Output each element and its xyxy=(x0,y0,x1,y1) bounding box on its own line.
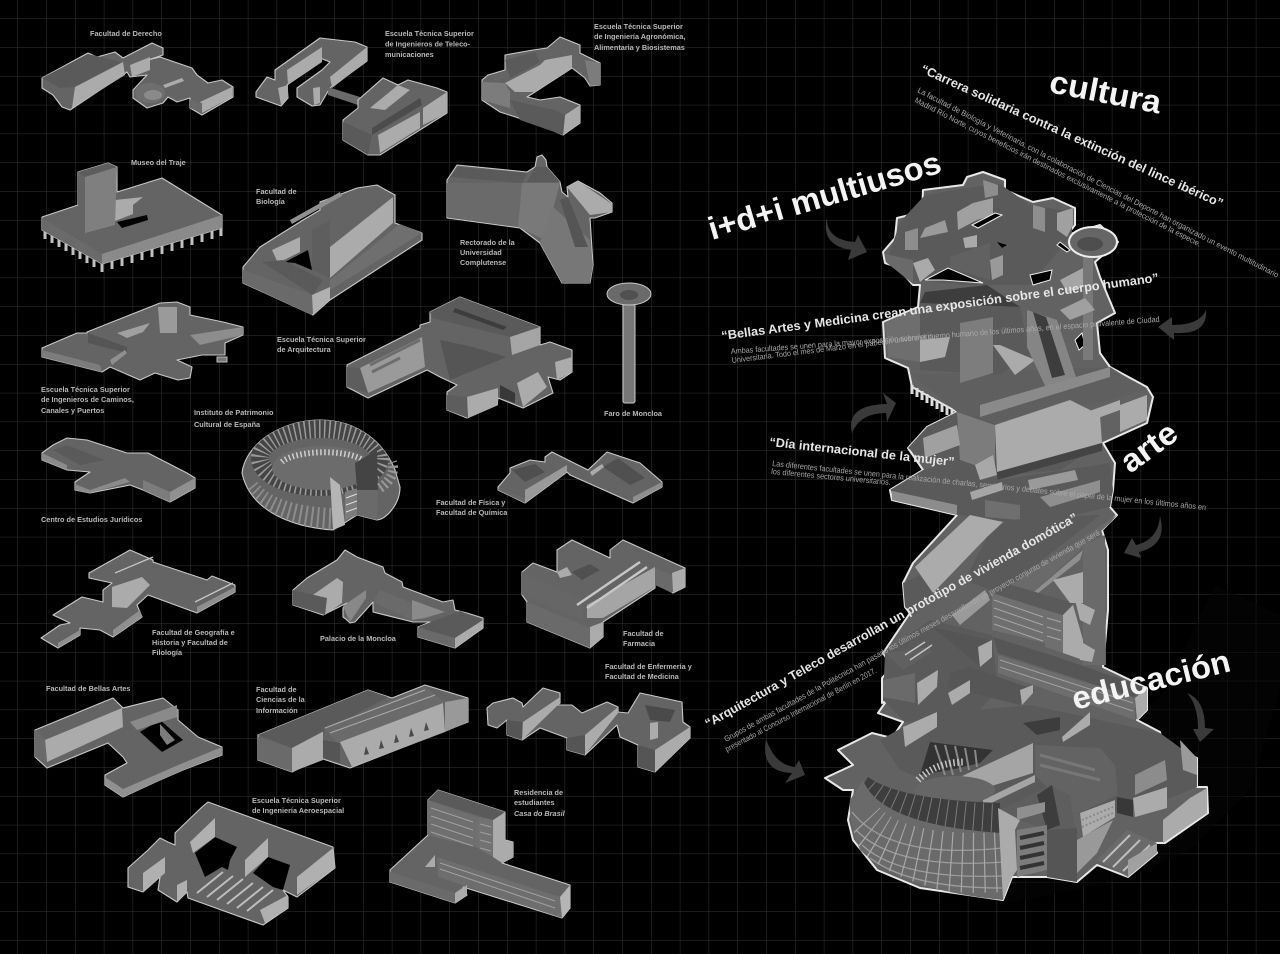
building: Ciencias de la Información xyxy=(256,685,468,772)
label: Escuela Técnica Superior xyxy=(41,385,130,394)
museo block and columns xyxy=(885,285,1147,425)
slabs xyxy=(890,455,1113,525)
label: Filología xyxy=(152,648,183,657)
label: Escuela Técnica Superior xyxy=(385,29,474,38)
building: Agronómica xyxy=(482,22,685,135)
label: Farmacia xyxy=(623,639,656,648)
coliseum xyxy=(850,777,1047,900)
building: Facultad de Derecho xyxy=(42,29,233,115)
label: Casa do Brasil xyxy=(514,809,566,818)
building: Faro de Moncloa xyxy=(604,283,663,418)
building: Física y Química xyxy=(436,452,662,517)
news: Carrera solidaria: “Carrera solidaria contra la extinción del lince ibérico” xyxy=(919,62,1225,211)
label: Canales y Puertos xyxy=(41,406,104,415)
label: de Ingenieros de Teleco- xyxy=(385,40,471,48)
label: Información xyxy=(256,706,298,715)
building: Instituto de Patrimonio xyxy=(194,408,400,530)
news: Bellas Artes: “Bellas Artes y Medicina crean una exposición sobre el cuerpo humano” xyxy=(721,271,1160,343)
label: Facultad de Derecho xyxy=(90,29,162,38)
label: municaciones xyxy=(385,50,434,59)
news body line 2: Madrid Río Norte, cuyos beneficios irán destinados exclusivamente a la protección de la especie. xyxy=(913,96,1203,249)
building: Caminos xyxy=(41,302,243,415)
striped block xyxy=(992,572,1095,662)
label: Historia y Facultad de xyxy=(152,638,228,647)
news body line 2: los diferentes sectores universitarios. xyxy=(771,467,891,487)
label: Facultad de Medicina xyxy=(605,672,680,681)
label: de Ingenieros de Caminos, xyxy=(41,395,134,404)
top cluster xyxy=(885,180,1083,292)
theme heading: i+d+i multiusos: i+d+i multiusos xyxy=(704,144,945,247)
label: de Arquitectura xyxy=(277,345,332,354)
building: Telecomunicaciones xyxy=(256,29,474,155)
label: Ciencias de la xyxy=(256,695,306,704)
label: Cultural de España xyxy=(194,420,261,429)
label: Facultad de Geografía e xyxy=(152,628,235,637)
label: Museo del Traje xyxy=(131,158,186,167)
building: Centro de Estudios Jurídicos xyxy=(41,438,195,524)
building: Enfermería y Medicina xyxy=(487,662,693,772)
arrow: right lower xyxy=(1187,693,1214,742)
news: Día de la mujer: “Día internacional de la mujer” xyxy=(769,435,955,469)
building: Arquitectura xyxy=(277,297,572,418)
arrow: right middle xyxy=(1124,516,1162,558)
arrow: right upper xyxy=(1158,310,1206,340)
label: Palacio de la Moncloa xyxy=(320,634,397,643)
news: Arquitectura y Teleco: “Arquitectura y Teleco desarrollan un prototipo de vivienda domótica” xyxy=(703,510,1080,731)
label: Universidad xyxy=(460,248,502,257)
label: Complutense xyxy=(460,258,506,267)
building: Geografía e Historia xyxy=(41,550,235,657)
label: Residencia de xyxy=(514,788,563,797)
news body: Las diferentes facultades se unen para la realización de charlas, seminarios y debates sobre el papel de la mujer en los últimos años en xyxy=(772,459,1206,512)
news: Día de la mujer xyxy=(769,435,1206,512)
slanted light volume xyxy=(903,515,1117,665)
label: Escuela Técnica Superior xyxy=(594,22,683,31)
arrow: left lower xyxy=(765,739,805,783)
label: Facultad de xyxy=(623,629,664,638)
label: Facultad de Enfermería y xyxy=(605,662,692,671)
theme heading: educación: educación xyxy=(1068,643,1234,717)
label: Facultad de Química xyxy=(436,508,508,517)
faro disc and stem xyxy=(1069,227,1117,360)
middle stack xyxy=(883,590,1033,722)
label: Instituto de Patrimonio xyxy=(194,408,273,417)
label: Centro de Estudios Jurídicos xyxy=(41,515,142,524)
label: Facultad de Bellas Artes xyxy=(46,684,130,693)
central tower of stacked buildings xyxy=(825,172,1208,900)
building: Museo del Traje xyxy=(42,158,222,272)
building: Aeroespacial xyxy=(128,796,344,925)
label: Facultad de Física y xyxy=(436,498,505,507)
label: Escuela Técnica Superior xyxy=(252,796,341,805)
light block xyxy=(908,395,1147,480)
label: Faro de Moncloa xyxy=(604,409,663,418)
building: Farmacia xyxy=(522,540,685,648)
arrow: to i+d+i block xyxy=(826,217,867,260)
label: Escuela Técnica Superior xyxy=(277,335,366,344)
label: Biología xyxy=(256,197,286,206)
label: Facultad de xyxy=(256,685,297,694)
news body: Ambas facultades se unen para la mayor exposición sobre el cuerpo humano de los últimos años, en el espacio polivalente de Ciudad xyxy=(730,315,1160,356)
building: Rectorado xyxy=(447,155,612,283)
building: Casa do Brasil xyxy=(390,788,570,918)
news body: Grupos de ambas facultades de la Politécnica han pasado los últimos meses desarrollando un proyecto conjunto de vivienda que será xyxy=(723,528,1102,744)
building: Bellas Artes xyxy=(35,684,222,797)
news body line 2: Universitaria. Todo el mes de Marzo en el pabellón universitario. xyxy=(731,331,936,365)
building: Palacio de la Moncloa xyxy=(293,550,483,648)
news body line 2: presentado al Concurso Internacional de Berlín en 2017. xyxy=(724,666,878,754)
shadow blob behind tower xyxy=(1000,585,1280,905)
label: de Ingeniería Agronómica, xyxy=(594,32,685,41)
fan of ribs and floor xyxy=(915,742,995,804)
right wing with windows xyxy=(1000,785,1207,882)
lower slab xyxy=(993,637,1147,720)
wings above coliseum xyxy=(880,705,1197,815)
label: Facultad de xyxy=(256,187,297,196)
label: de Ingeniería Aeroespacial xyxy=(252,806,344,815)
news: Carrera solidaria xyxy=(916,62,1280,280)
arrow: left middle xyxy=(851,393,896,433)
theme heading: cultura: cultura xyxy=(1047,64,1165,120)
label: Alimentaria y Biosistemas xyxy=(594,43,685,52)
building: Facultad de Biología xyxy=(243,185,422,315)
theme heading: arte: arte xyxy=(1113,414,1184,480)
label: Rectorado de la xyxy=(460,238,515,247)
label: estudiantes xyxy=(514,798,555,807)
